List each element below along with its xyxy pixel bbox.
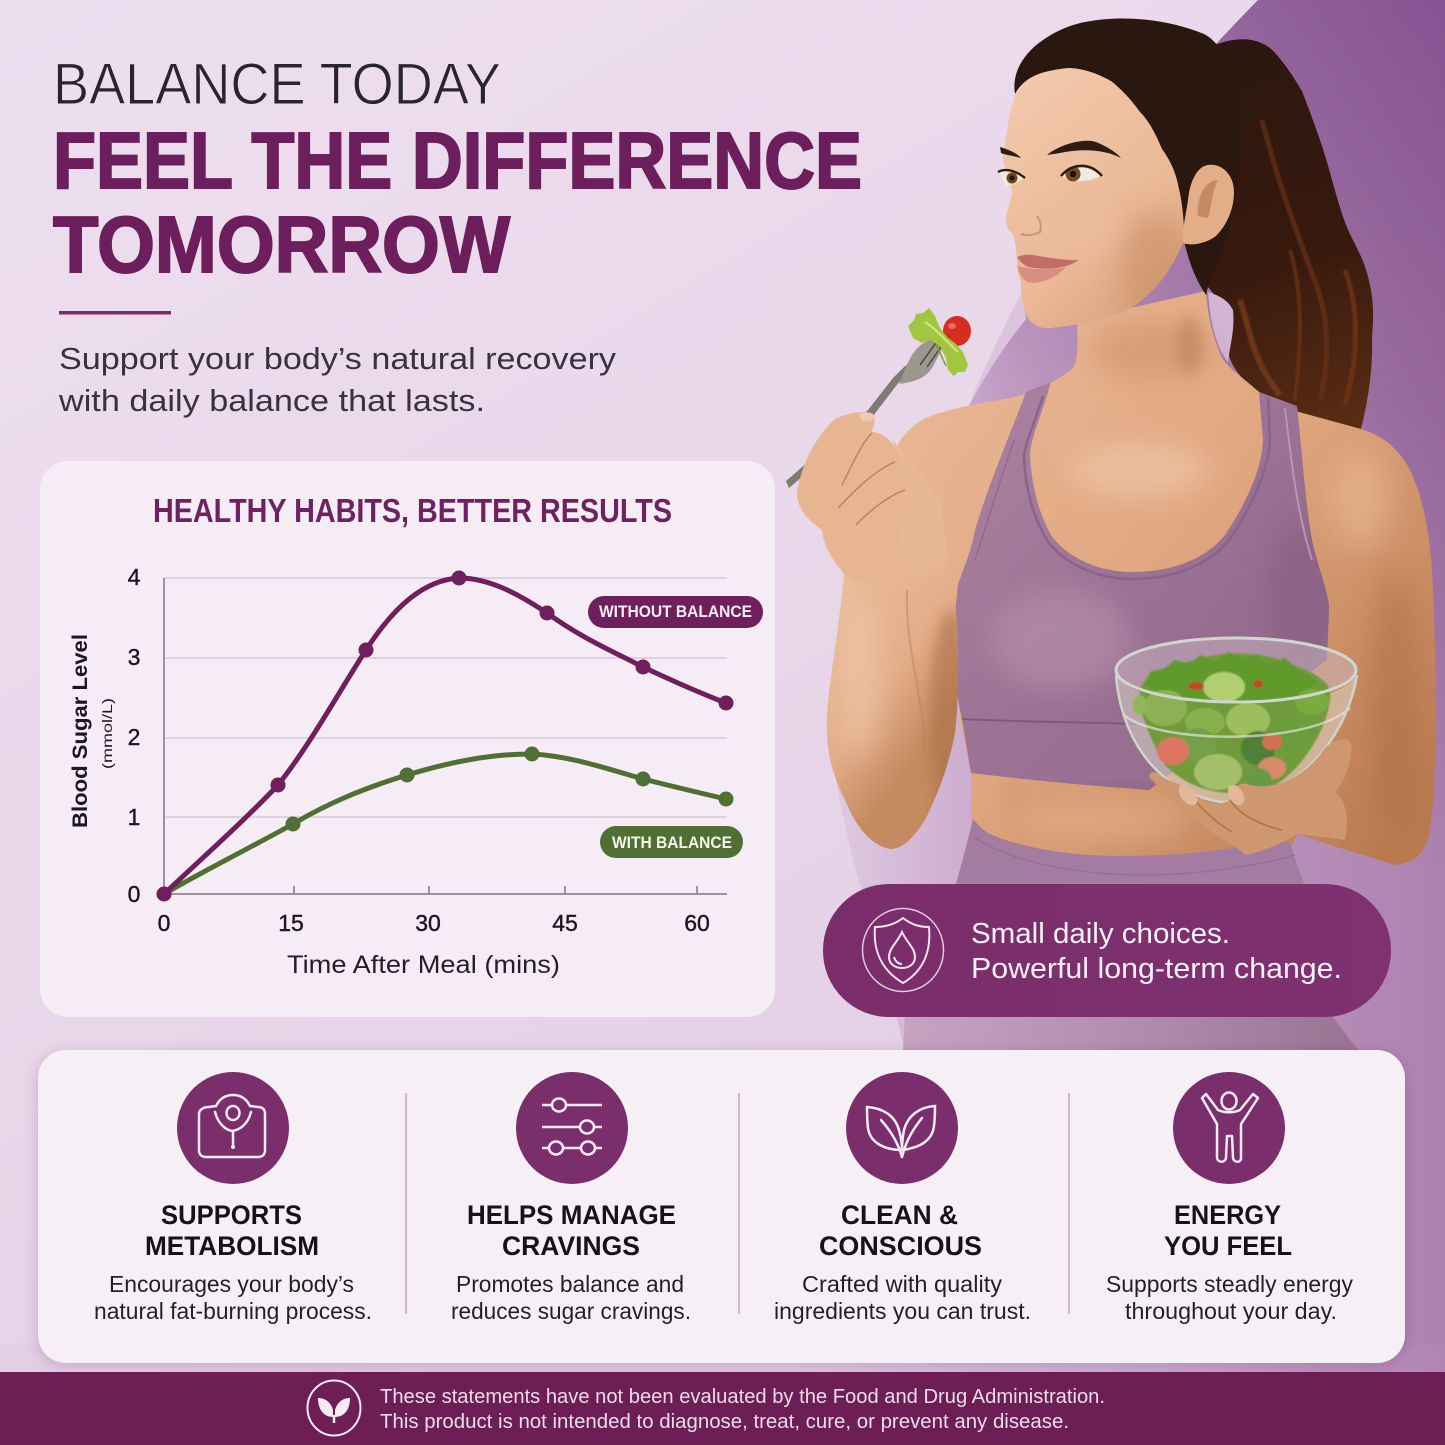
x axis numbers: 45 — [552, 910, 578, 936]
y axis numbers: 1 — [128, 804, 140, 830]
disclaimer text — [380, 1386, 1105, 1433]
chart heading: HEALTHY HABITS, BETTER RESULTS — [153, 492, 672, 529]
benefit title: YOU FEEL — [1164, 1231, 1292, 1261]
callout pill — [823, 884, 1391, 1017]
y axis numbers: 2 — [128, 724, 140, 750]
icon: leaves — [846, 1072, 958, 1184]
benefit title: ENERGY — [1174, 1200, 1281, 1230]
benefit: energy you feel — [1106, 1072, 1353, 1324]
disclaimer text: This product is not intended to diagnose, treat, cure, or prevent any disease. — [380, 1411, 1069, 1433]
label: with balance — [600, 826, 743, 858]
x axis numbers: 15 — [278, 910, 304, 936]
title line: feel the difference: FEEL THE DIFFERENCE — [53, 116, 862, 205]
salad — [1133, 652, 1330, 793]
y axis numbers: 0 — [128, 881, 140, 907]
benefit text: ingredients you can trust. — [774, 1298, 1031, 1324]
benefit title: METABOLISM — [145, 1231, 319, 1261]
y axis title: Blood Sugar Level — [69, 634, 92, 828]
benefit text: reduces sugar cravings. — [451, 1298, 691, 1324]
icon: person arms raised — [1173, 1072, 1285, 1184]
ear — [1183, 165, 1234, 244]
benefit title: HELPS MANAGE — [467, 1200, 676, 1230]
sports top — [954, 382, 1330, 790]
woman illustration — [786, 18, 1436, 1050]
hand holding fork — [797, 412, 907, 584]
callout text: Small daily choices. — [971, 918, 1230, 950]
callout text: Powerful long-term change. — [971, 953, 1342, 985]
heading rule — [59, 311, 171, 314]
leggings — [903, 819, 1358, 1050]
ponytail — [1190, 39, 1373, 429]
y axis numbers: 3 — [128, 644, 140, 670]
chart axes — [164, 578, 727, 894]
hand under bowl — [1150, 740, 1351, 855]
skin shading — [1000, 315, 1419, 862]
icon: scale — [177, 1072, 289, 1184]
benefit text — [774, 1271, 1031, 1324]
y axis numbers: 4 — [128, 564, 141, 590]
label: without balance: WITHOUT BALANCE — [599, 602, 752, 621]
subheading — [58, 341, 617, 418]
benefit text: Supports steadly energy — [1106, 1271, 1353, 1297]
benefit text: Crafted with quality — [802, 1271, 1003, 1297]
benefit title — [467, 1200, 676, 1261]
benefit title — [1164, 1200, 1292, 1261]
x axis title: Time After Meal (mins) — [287, 951, 560, 979]
x axis numbers: 0 — [158, 910, 170, 936]
footer disclaimer bar — [0, 1372, 1445, 1445]
icon: shield with drop — [862, 908, 944, 992]
line: with balance — [164, 746, 734, 894]
y axis unit: (mmol/L) — [99, 698, 115, 769]
nose — [1021, 216, 1041, 235]
headline — [53, 52, 862, 289]
disclaimer text: These statements have not been evaluated by the Food and Drug Administration. — [380, 1386, 1105, 1408]
eyebrows — [1047, 141, 1121, 158]
benefit text: Encourages your body’s — [109, 1271, 354, 1297]
benefit title: CLEAN & — [841, 1200, 958, 1230]
bowl rim — [1116, 638, 1356, 702]
benefit title: SUPPORTS — [161, 1200, 302, 1230]
eye right — [1061, 166, 1102, 182]
benefit text: throughout your day. — [1125, 1298, 1337, 1324]
benefit title — [819, 1200, 982, 1261]
benefit title: CONSCIOUS — [819, 1231, 982, 1261]
subheading: with daily balance that lasts. — [58, 383, 485, 418]
icon: leaf badge — [308, 1380, 360, 1436]
label: without balance — [588, 596, 763, 628]
title line: tomorrow: TOMORROW — [53, 200, 510, 289]
benefit text: Promotes balance and — [456, 1271, 684, 1297]
benefit text: natural fat-burning process. — [94, 1298, 372, 1324]
lips — [1017, 255, 1079, 283]
icon: sliders — [516, 1072, 628, 1184]
bowl glass — [1116, 675, 1357, 802]
y axis numbers — [128, 564, 141, 907]
title line: balance today: BALANCE TODAY — [53, 52, 501, 117]
salad bowl — [1116, 638, 1357, 802]
neck, shoulders and torso — [893, 291, 1436, 875]
callout text — [971, 918, 1342, 985]
line: without balance — [156, 570, 734, 902]
benefit text — [94, 1271, 372, 1324]
subheading: Support your body’s natural recovery — [59, 341, 617, 376]
raised arm — [822, 440, 958, 849]
x axis numbers — [158, 910, 710, 936]
face and head — [998, 68, 1184, 328]
hair cap — [1014, 18, 1240, 295]
panel: benefits — [38, 1050, 1405, 1363]
benefit title: CRAVINGS — [502, 1231, 640, 1261]
label: with balance: WITH BALANCE — [612, 833, 732, 852]
x axis numbers: 30 — [415, 910, 441, 936]
x axis numbers: 60 — [684, 910, 710, 936]
benefit title — [145, 1200, 319, 1261]
benefit: clean and conscious — [774, 1072, 1031, 1324]
benefit text — [451, 1271, 691, 1324]
benefit text — [1106, 1271, 1353, 1324]
fork with salad — [786, 308, 971, 488]
eye left — [998, 170, 1025, 186]
benefit: supports metabolism — [94, 1072, 372, 1324]
benefit: helps manage cravings — [451, 1072, 691, 1324]
panel: blood sugar chart — [40, 461, 775, 1017]
